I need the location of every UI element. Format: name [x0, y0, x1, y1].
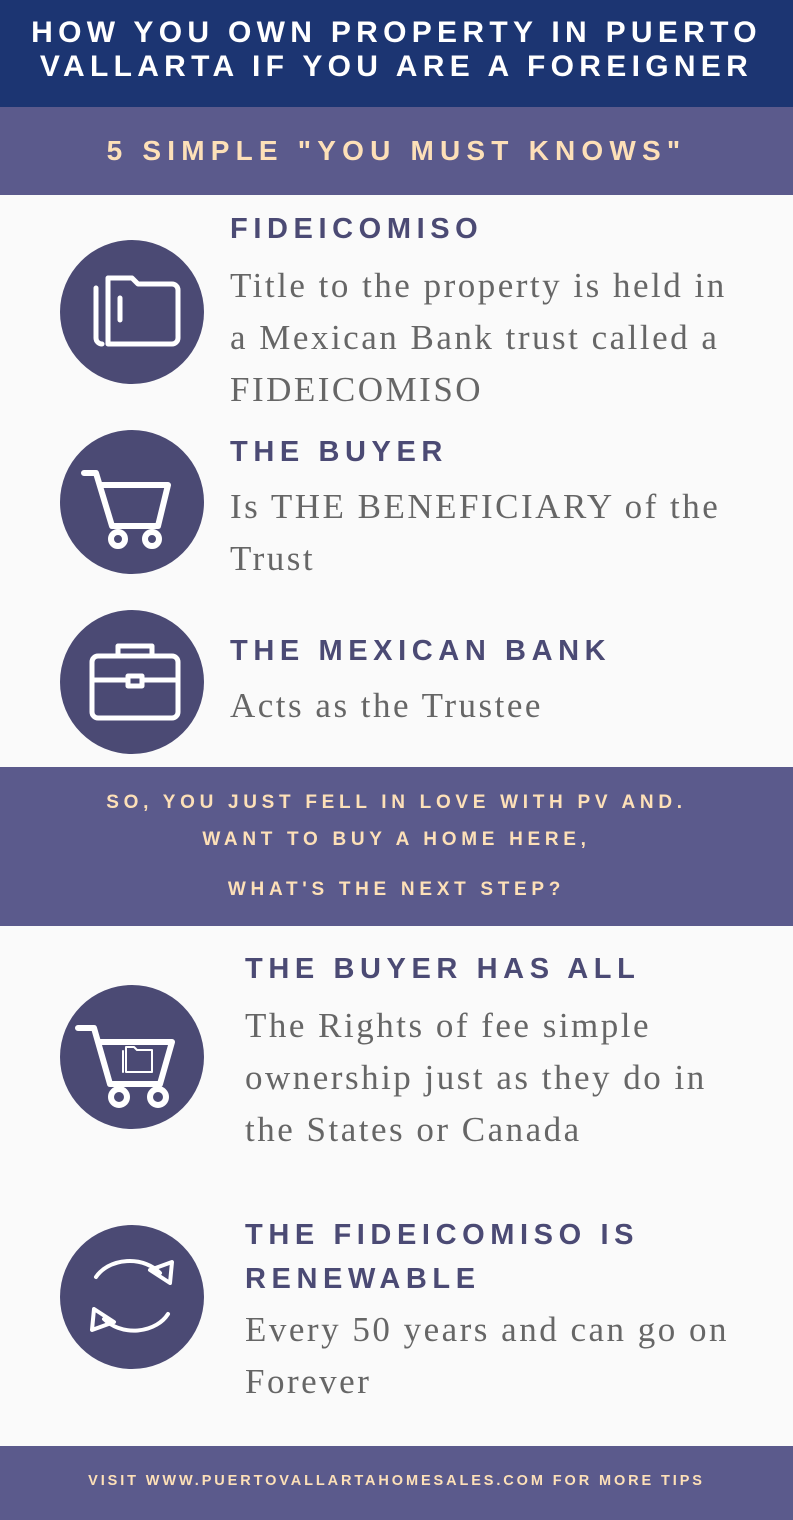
header title	[0, 0, 793, 107]
icon: folder	[60, 240, 204, 384]
header title: VALLARTA IF YOU ARE A FOREIGNER	[40, 50, 753, 83]
text: fideicomiso renewable: Forever	[245, 1362, 371, 1401]
subtitle band	[0, 107, 793, 195]
icon: renew arrows	[60, 1225, 204, 1369]
text: the buyer has all: The Rights of fee simple	[245, 1006, 651, 1045]
middle band: WANT TO BUY A HOME HERE,	[202, 829, 591, 850]
text: the buyer: Trust	[230, 539, 315, 578]
icon: briefcase	[60, 610, 204, 754]
text: fideicomiso renewable: Every 50 years and can go on	[245, 1310, 729, 1349]
text: the buyer has all: the States or Canada	[245, 1110, 582, 1149]
heading: the buyer has all: THE BUYER HAS ALL	[245, 953, 640, 985]
middle band: WHAT'S THE NEXT STEP?	[228, 879, 565, 900]
text: fideicomiso: FIDEICOMISO	[230, 370, 483, 409]
middle band: SO, YOU JUST FELL IN LOVE WITH PV AND.	[106, 792, 687, 813]
footer	[0, 1446, 793, 1520]
icon: cart	[60, 430, 204, 574]
subtitle band: 5 SIMPLE "YOU MUST KNOWS"	[107, 135, 686, 166]
text: fideicomiso: Title to the property is held in	[230, 266, 727, 305]
text: the mexican bank: Acts as the Trustee	[230, 686, 543, 725]
text: the buyer has all	[245, 1006, 707, 1149]
text: fideicomiso renewable	[245, 1310, 729, 1401]
text: fideicomiso: a Mexican Bank trust called a	[230, 318, 719, 357]
text: fideicomiso	[230, 266, 727, 409]
middle band	[0, 767, 793, 926]
heading: fideicomiso renewable	[245, 1219, 639, 1295]
heading: the buyer: THE BUYER	[230, 436, 448, 468]
icon: cart with folder	[60, 985, 204, 1129]
footer: VISIT WWW.PUERTOVALLARTAHOMESALES.COM FOR MORE TIPS	[88, 1473, 705, 1489]
heading: the mexican bank: THE MEXICAN BANK	[230, 635, 611, 667]
text: the buyer has all: ownership just as they do in	[245, 1058, 707, 1097]
heading: fideicomiso renewable: RENEWABLE	[245, 1263, 481, 1295]
text: the buyer	[230, 487, 720, 578]
heading: fideicomiso renewable: THE FIDEICOMISO IS	[245, 1219, 639, 1251]
header title: HOW YOU OWN PROPERTY IN PUERTO	[31, 16, 762, 49]
heading: fideicomiso: FIDEICOMISO	[230, 213, 483, 245]
text: the buyer: Is THE BENEFICIARY of the	[230, 487, 720, 526]
